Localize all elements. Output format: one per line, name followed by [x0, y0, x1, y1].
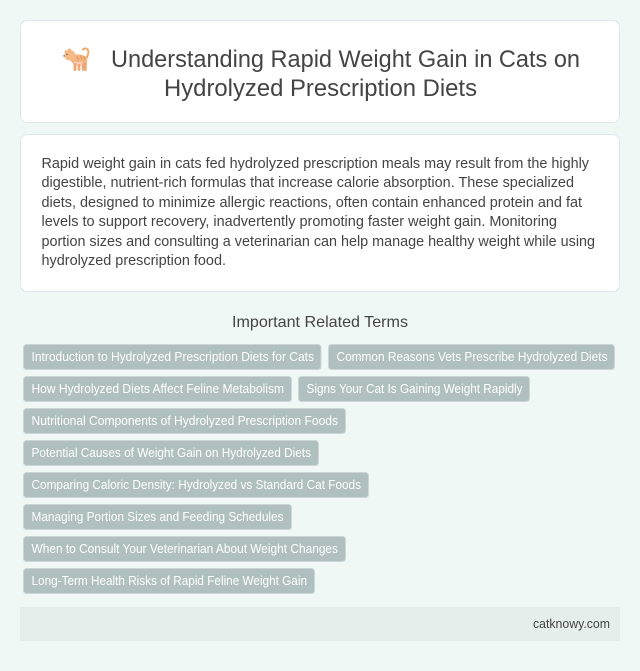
description text: levels to support recovery, inadvertently promoting faster weight gain. Monitoring [42, 214, 557, 230]
description text: portion sizes and consulting a veterinarian can help manage healthy weight while using [42, 234, 595, 250]
tag: When to Consult Your Veterinarian About Weight Changes [32, 542, 338, 556]
tag [24, 504, 292, 530]
tag: Signs Your Cat Is Gaining Weight Rapidly [306, 382, 523, 396]
description text: diets, designed to minimize allergic reactions, often contain enhanced protein and fat [42, 195, 582, 211]
description text: Rapid weight gain in cats fed hydrolyzed prescription meals may result from the highly [42, 156, 590, 172]
description text [42, 156, 595, 269]
tag: Introduction to Hydrolyzed Prescription Diets for Cats [32, 350, 314, 364]
tag [24, 408, 346, 434]
tag: Managing Portion Sizes and Feeding Schedules [32, 510, 284, 524]
title text: Hydrolyzed Prescription Diets [164, 75, 477, 102]
tag [328, 344, 614, 370]
tag [24, 536, 346, 562]
heading: related terms: Important Related Terms [232, 314, 408, 331]
tag: Potential Causes of Weight Gain on Hydrolyzed Diets [32, 446, 311, 460]
title text: Understanding Rapid Weight Gain in Cats on [111, 46, 580, 73]
panel: title card [20, 20, 620, 122]
panel: description [20, 134, 620, 292]
tag: Common Reasons Vets Prescribe Hydrolyzed Diets [336, 350, 608, 364]
description text: digestible, nutrient-rich formulas that increase calorie absorption. These specialized [42, 175, 574, 191]
tag: Nutritional Components of Hydrolyzed Prescription Foods [32, 414, 338, 428]
tag [24, 568, 314, 594]
tag [24, 344, 321, 370]
footer [20, 607, 620, 641]
tag [24, 440, 318, 466]
description text: hydrolyzed prescription food. [42, 253, 226, 269]
tag: Long-Term Health Risks of Rapid Feline Weight Gain [32, 574, 307, 588]
panel: related term tags [24, 344, 614, 594]
footer source text: catknowy.com [533, 616, 610, 631]
tag: Comparing Caloric Density: Hydrolyzed vs Standard Cat Foods [32, 478, 361, 492]
tag [298, 376, 530, 402]
tag [24, 472, 368, 498]
tag: How Hydrolyzed Diets Affect Feline Metabolism [32, 382, 284, 396]
tag [24, 376, 292, 402]
icon: cat [63, 48, 88, 71]
title text [111, 46, 580, 102]
